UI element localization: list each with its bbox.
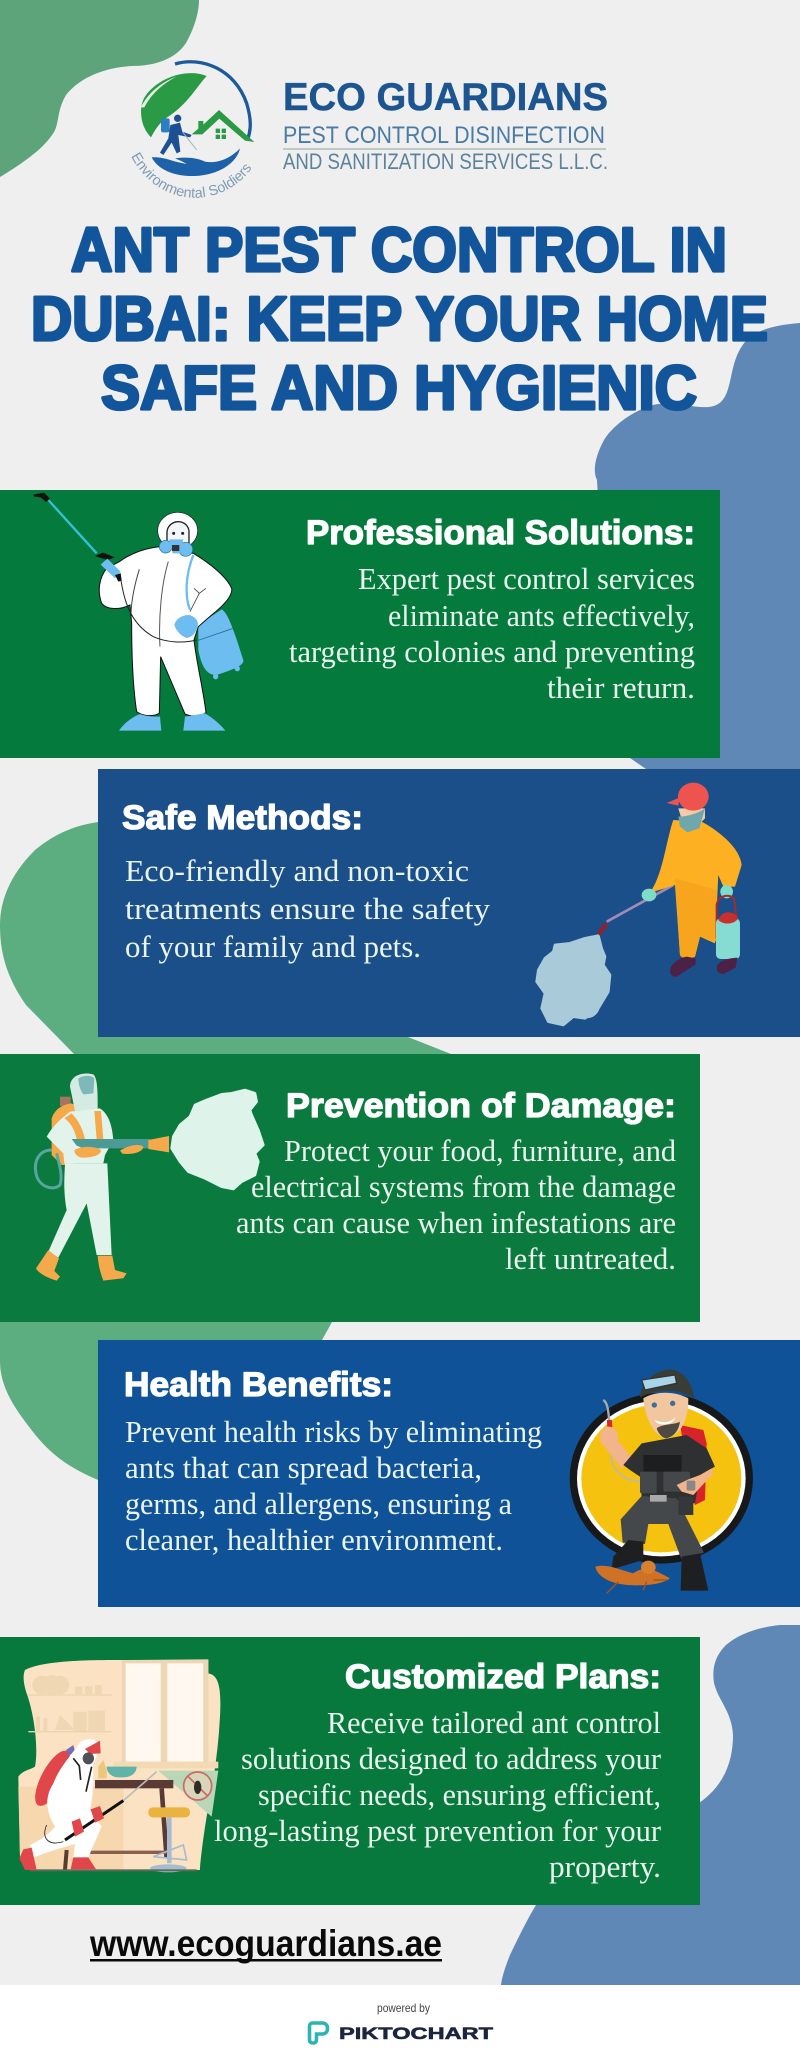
body text: targeting colonies and preventing <box>289 634 695 669</box>
title: SAFE AND HYGIENIC <box>101 354 697 423</box>
website link: www.ecoguardians.ae <box>89 1923 442 1964</box>
blob: green lower <box>0 1322 332 1480</box>
heading: Health Benefits: <box>124 1366 393 1404</box>
body text: treatments ensure the safety <box>125 891 491 926</box>
body text: Protect your food, furniture, and <box>284 1133 676 1168</box>
body text <box>236 1133 676 1276</box>
body text: electrical systems from the damage <box>251 1169 676 1204</box>
blob: green middle <box>0 822 451 1054</box>
body text: property. <box>549 1849 661 1884</box>
icon: worker with fogger <box>35 1073 263 1281</box>
powered by text: powered by <box>377 2001 430 2015</box>
icon: worker in white suit <box>33 493 243 731</box>
logo <box>132 60 608 198</box>
blob: blue upper right <box>595 323 800 769</box>
body text: germs, and allergens, ensuring a <box>125 1486 512 1521</box>
body text: left untreated. <box>505 1241 676 1276</box>
blob: green top left <box>0 0 199 177</box>
footer band <box>0 1985 800 2065</box>
body text: ants that can spread bacteria, <box>125 1450 482 1485</box>
body text <box>125 853 491 964</box>
icon: kitchen treatment scene <box>18 1659 220 1872</box>
body text <box>125 1414 542 1557</box>
title <box>31 216 768 423</box>
icon: piktochart mark <box>310 2023 328 2043</box>
icon: worker in orange suit <box>537 783 742 1025</box>
body text: Prevent health risks by eliminating <box>125 1414 542 1449</box>
heading: Professional Solutions: <box>306 514 695 552</box>
body text: long-lasting pest prevention for your <box>214 1813 662 1848</box>
logo tagline: Environmental Soldiers <box>132 152 251 198</box>
footer: powered by piktochart <box>310 2001 494 2043</box>
body text: specific needs, ensuring efficient, <box>258 1777 661 1812</box>
body text: eliminate ants effectively, <box>388 598 695 633</box>
panel: prevention of damage <box>0 1054 700 1322</box>
brand line two: AND SANITIZATION SERVICES L.L.C. <box>283 149 608 174</box>
panel: safe methods <box>98 769 800 1037</box>
brand name: ECO GUARDIANS <box>283 76 608 119</box>
body text <box>289 561 695 705</box>
panel: professional solutions <box>0 490 720 758</box>
blob: blue lower right <box>501 1625 800 1985</box>
title: ANT PEST CONTROL IN <box>71 216 727 285</box>
panel: customized plans <box>0 1637 700 1905</box>
body text: cleaner, healthier environment. <box>125 1522 503 1557</box>
icon: mascot exterminator <box>570 1369 753 1593</box>
body text: solutions designed to address your <box>241 1741 662 1776</box>
logo emblem <box>132 60 254 198</box>
body text: Eco-friendly and non-toxic <box>125 853 469 888</box>
body text <box>214 1705 662 1884</box>
body text: Expert pest control services <box>358 561 695 596</box>
body text: ants can cause when infestations are <box>236 1205 676 1240</box>
heading: Prevention of Damage: <box>286 1087 676 1125</box>
brand line one: PEST CONTROL DISINFECTION <box>283 122 605 149</box>
body text: of your family and pets. <box>125 929 421 964</box>
body text: their return. <box>547 670 695 705</box>
heading: Safe Methods: <box>122 799 363 837</box>
panel: health benefits <box>98 1340 800 1607</box>
body text: Receive tailored ant control <box>327 1705 661 1740</box>
piktochart wordmark: PIKTOCHART <box>339 2024 494 2043</box>
heading: Customized Plans: <box>345 1658 661 1696</box>
